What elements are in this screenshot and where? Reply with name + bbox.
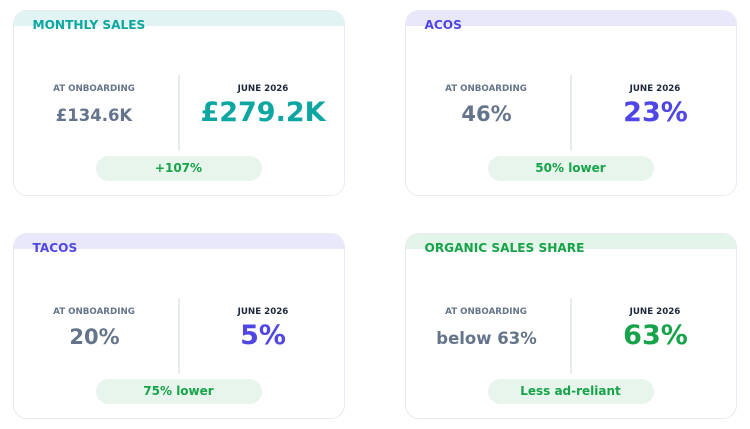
at onboarding value: below 63% xyxy=(436,329,537,348)
june 2026 value: 23% xyxy=(623,97,688,128)
heading: MONTHLY SALES xyxy=(32,18,145,32)
change pill xyxy=(488,379,654,404)
panel: acos xyxy=(405,10,737,196)
at onboarding label: AT ONBOARDING xyxy=(445,306,527,316)
june 2026 value: 5% xyxy=(240,320,286,351)
divider xyxy=(178,298,180,374)
change pill: 50% lower xyxy=(535,161,606,175)
header band xyxy=(404,232,736,248)
at onboarding value: 46% xyxy=(461,102,512,126)
heading: ORGANIC SALES SHARE xyxy=(424,240,584,254)
panel: monthly sales xyxy=(13,10,345,196)
header band xyxy=(404,10,736,26)
heading: TACOS xyxy=(32,240,77,254)
divider xyxy=(570,298,572,374)
june 2026 label: JUNE 2026 xyxy=(630,306,680,316)
at onboarding value: £134.6K xyxy=(56,106,132,125)
heading: ACOS xyxy=(424,18,462,32)
header band xyxy=(12,10,344,26)
june 2026 value: 63% xyxy=(623,320,688,351)
change pill: 75% lower xyxy=(143,384,214,398)
at onboarding label: AT ONBOARDING xyxy=(53,306,135,316)
panel: organic sales share xyxy=(405,233,737,419)
divider xyxy=(178,75,180,151)
june 2026 label: JUNE 2026 xyxy=(630,84,680,94)
june 2026 label: JUNE 2026 xyxy=(238,84,288,94)
divider xyxy=(570,75,572,151)
at onboarding value: 20% xyxy=(69,325,120,349)
change pill xyxy=(96,379,262,404)
change pill xyxy=(488,156,654,181)
june 2026 label: JUNE 2026 xyxy=(238,306,288,316)
june 2026 value: £279.2K xyxy=(200,97,326,128)
change pill xyxy=(96,156,262,181)
at onboarding label: AT ONBOARDING xyxy=(53,84,135,94)
panel: tacos xyxy=(13,233,345,419)
header band xyxy=(12,232,344,248)
change pill: Less ad-reliant xyxy=(520,384,621,398)
change pill: +107% xyxy=(155,161,202,175)
at onboarding label: AT ONBOARDING xyxy=(445,84,527,94)
